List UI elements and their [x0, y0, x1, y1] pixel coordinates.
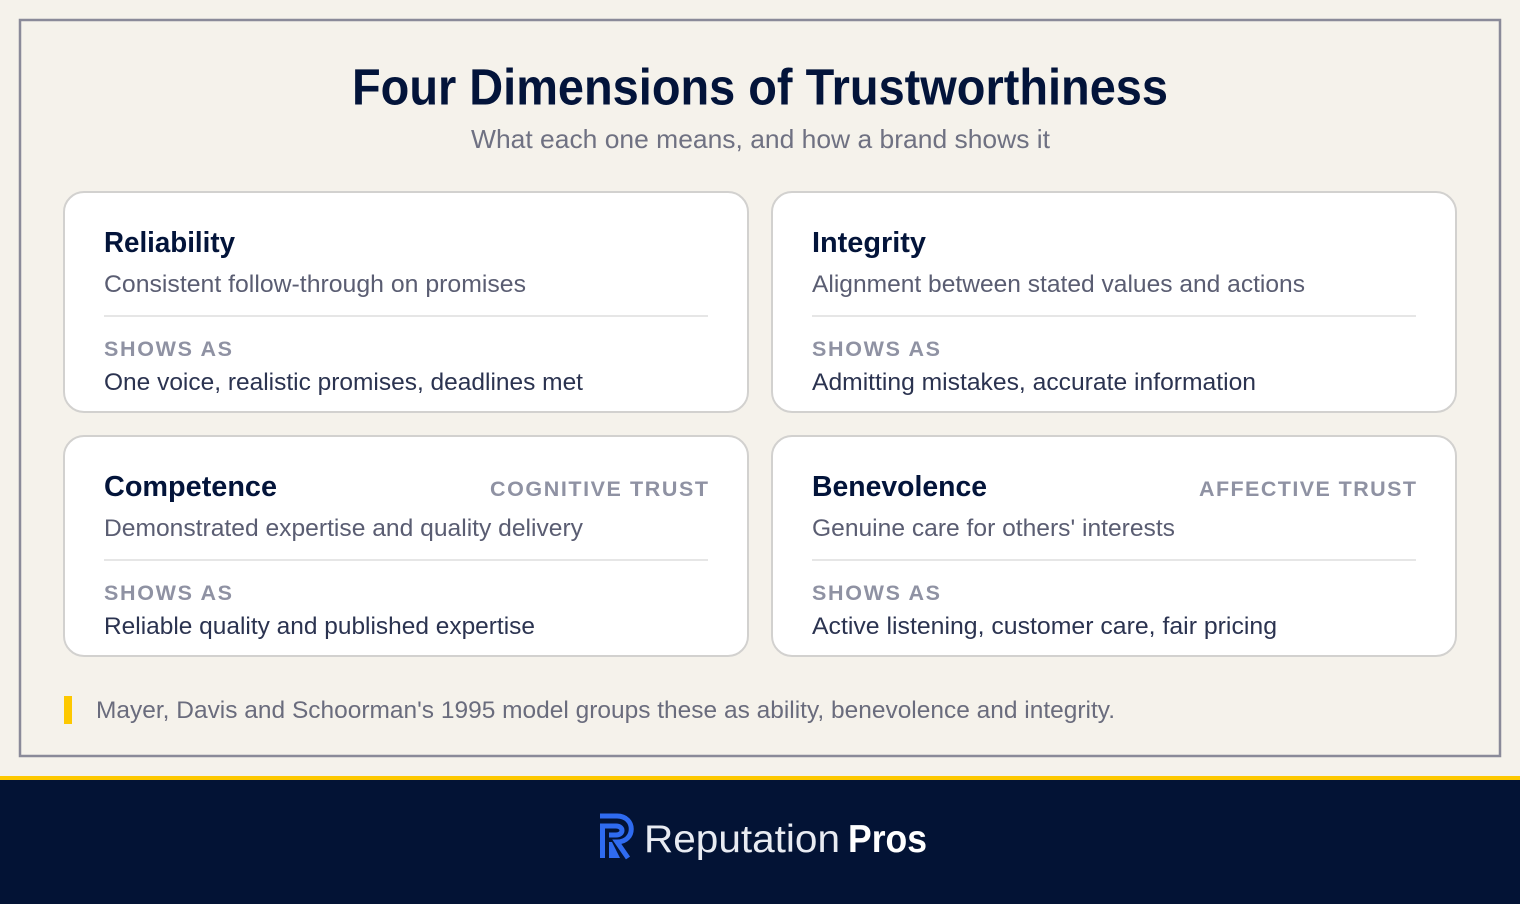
body: competence behaviours: Reliable quality and published expertise — [104, 613, 535, 640]
source note: Mayer, Davis and Schoorman's 1995 model groups these as ability, benevolence and integrity. — [96, 697, 1115, 724]
description: reliability: Consistent follow-through on promises — [104, 271, 526, 298]
label: shows as: SHOWS AS — [104, 581, 232, 605]
label: shows as: SHOWS AS — [812, 337, 940, 361]
panel: integrity — [772, 192, 1456, 412]
footer band — [0, 776, 1520, 904]
body: benevolence behaviours: Active listening, customer care, fair pricing — [812, 613, 1277, 640]
subtitle: What each one means, and how a brand shows it — [471, 124, 1051, 154]
icon: R mark — [600, 816, 631, 858]
label: shows as: SHOWS AS — [812, 581, 940, 605]
accent bar: source note — [64, 696, 72, 724]
label: shows as: SHOWS AS — [104, 337, 232, 361]
title: Four Dimensions of Trustworthiness — [352, 58, 1168, 116]
panel: benevolence — [772, 436, 1456, 656]
heading: competence: Competence — [104, 471, 277, 503]
body: integrity behaviours: Admitting mistakes, accurate information — [812, 369, 1256, 396]
description: competence: Demonstrated expertise and quality delivery — [104, 515, 584, 542]
tag: cognitive trust: COGNITIVE TRUST — [490, 477, 708, 501]
heading: benevolence: Benevolence — [812, 471, 987, 503]
body: reliability behaviours: One voice, realistic promises, deadlines met — [104, 369, 583, 396]
wordmark: Reputation — [644, 818, 840, 861]
outer frame — [20, 20, 1500, 756]
panel: reliability — [64, 192, 748, 412]
logo: Reputation Pros: Pros — [848, 818, 927, 861]
heading: integrity: Integrity — [812, 227, 926, 259]
logo: Reputation Pros — [600, 816, 927, 861]
tag: affective trust: AFFECTIVE TRUST — [1199, 477, 1416, 501]
panel: competence — [64, 436, 748, 656]
heading: reliability: Reliability — [104, 227, 235, 259]
description: integrity: Alignment between stated values and actions — [812, 271, 1305, 298]
description: benevolence: Genuine care for others' interests — [812, 515, 1175, 542]
